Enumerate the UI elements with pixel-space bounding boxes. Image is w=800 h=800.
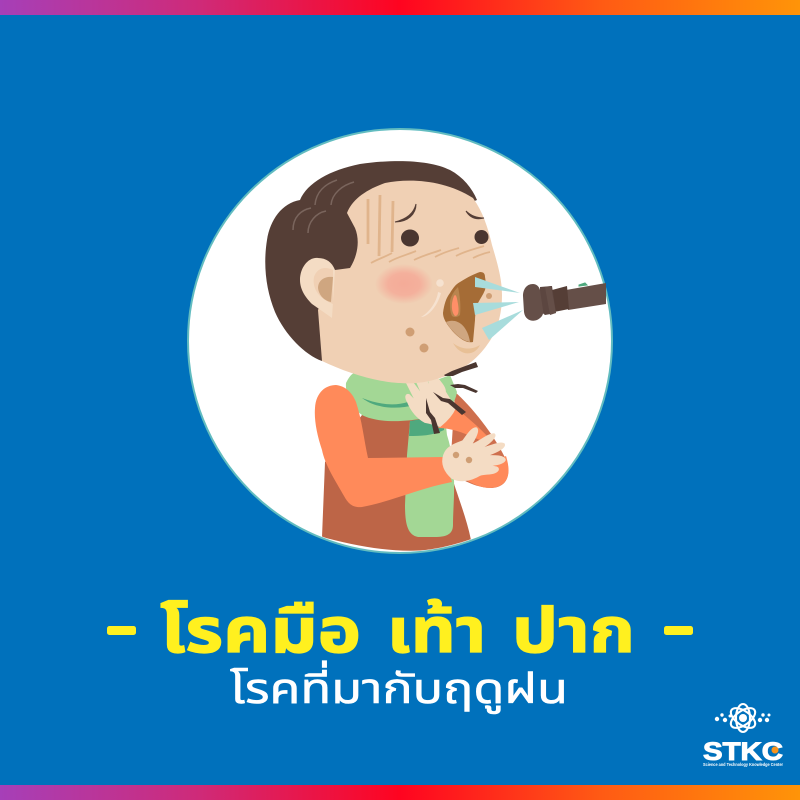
scarf [346, 372, 457, 537]
face [318, 181, 502, 383]
hair [265, 161, 477, 361]
flashlight beams [473, 277, 523, 340]
illustration circle [188, 129, 612, 553]
title word 3: ปาก [512, 597, 635, 666]
lower hand [443, 428, 505, 480]
eyebrows [395, 204, 416, 222]
cheek shine [436, 279, 444, 287]
title word 2: เท้า [387, 597, 486, 666]
icon: flashlight [523, 283, 606, 321]
bottom gradient bar [0, 785, 800, 800]
logo wordmark: STKC [703, 738, 783, 766]
spots [406, 328, 414, 336]
upper hand [405, 378, 456, 427]
mouth [443, 272, 486, 342]
scratch marks: throat pain [426, 362, 478, 434]
eye wrinkles [371, 246, 490, 263]
lower lip [453, 343, 480, 353]
title left dash [107, 626, 136, 635]
icon: head [265, 161, 502, 383]
logo orange dot [772, 746, 778, 754]
cheek blush [375, 264, 433, 304]
title right dash [664, 626, 693, 635]
near sleeve [315, 385, 452, 507]
hair strands [293, 180, 354, 233]
far sleeve cuff [466, 456, 509, 488]
eyes [401, 230, 419, 246]
far sleeve [450, 392, 508, 488]
title [107, 597, 693, 666]
logo: STKC [703, 704, 783, 767]
figure: body and hands [315, 369, 509, 551]
ear [300, 258, 335, 318]
upper forearm [438, 408, 488, 440]
forehead wrinkles [368, 195, 393, 256]
vest [322, 415, 471, 551]
logo tagline: Science and Technology Knowledge Center [703, 762, 783, 767]
top gradient bar [0, 0, 800, 15]
title word 1: โรคมือ [160, 597, 361, 666]
logo atom mark [715, 704, 770, 732]
palm spots [453, 452, 459, 458]
subtitle: โรคที่มากับฤดูฝน [230, 660, 568, 714]
